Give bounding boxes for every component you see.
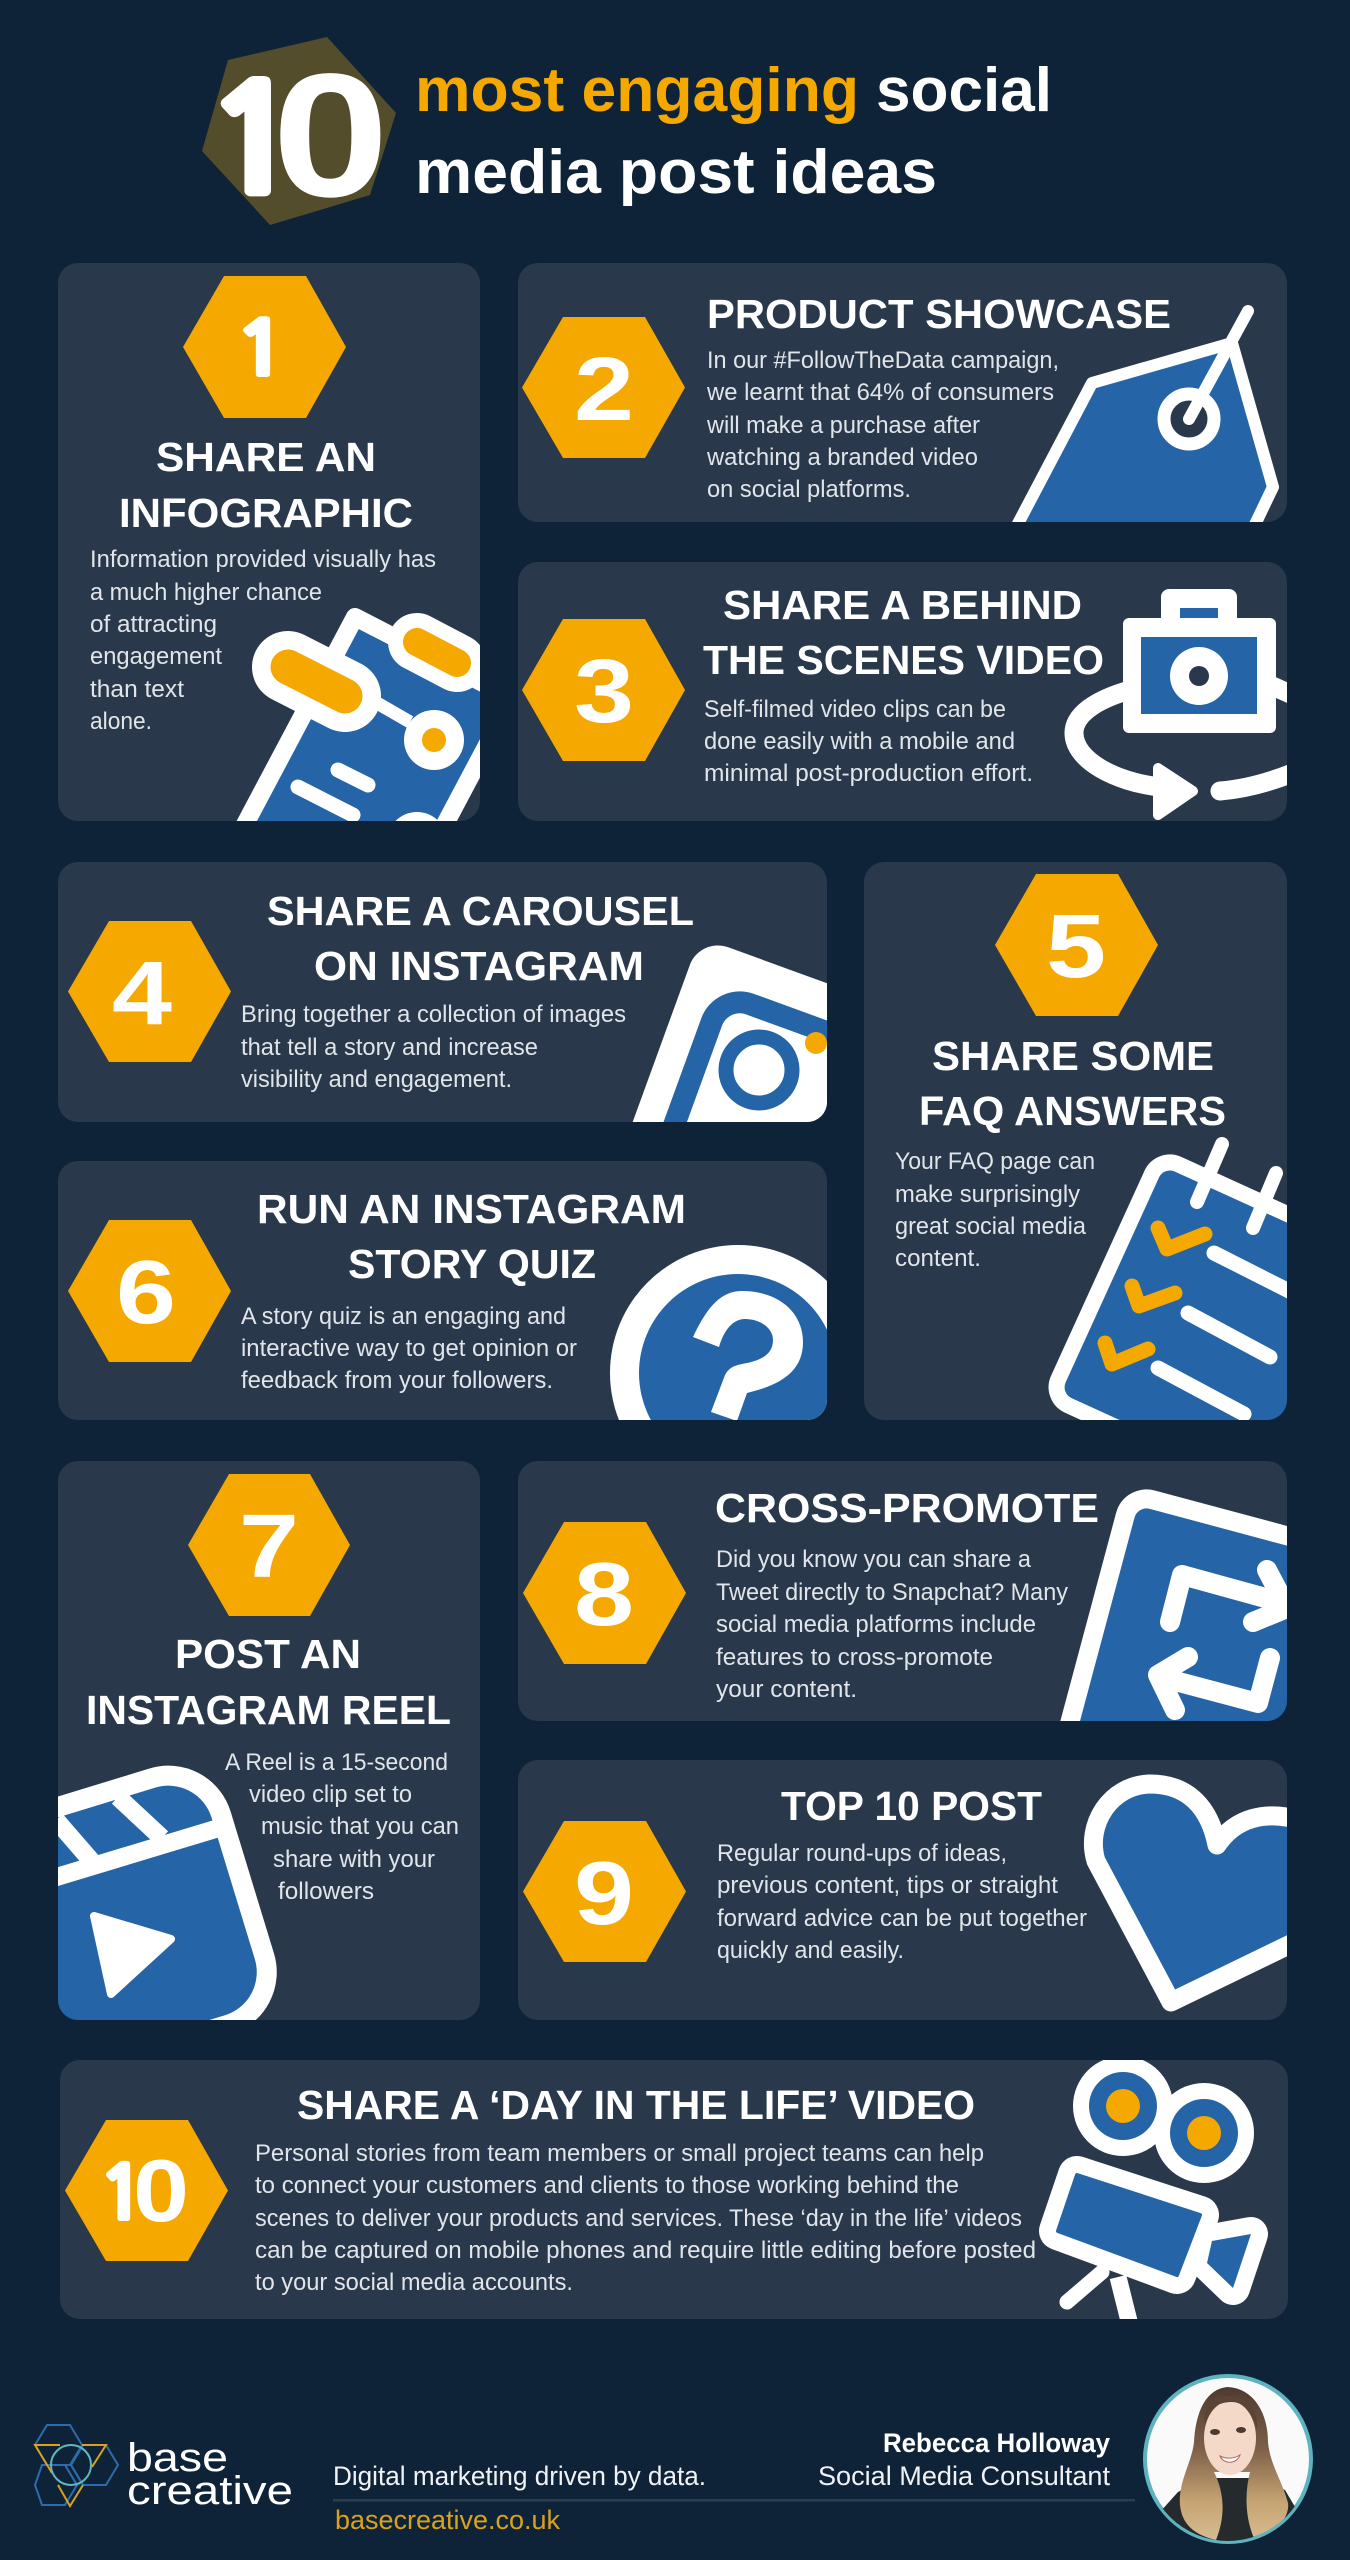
panel: 9 top 10 post (518, 1760, 1340, 2020)
body text: interactive way to get opinion or (241, 1335, 577, 1362)
body text: visibility and engagement. (241, 1066, 512, 1093)
body text (895, 1148, 1095, 1272)
body text: Information provided visually has (90, 546, 436, 573)
heading: FAQ ANSWERS (919, 1088, 1226, 1134)
tagline: Digital marketing driven by data. (333, 2461, 706, 2491)
body text: engagement (90, 643, 222, 670)
number hexagon 4 (68, 921, 231, 1062)
body text: to your social media accounts. (255, 2269, 573, 2296)
body text: content. (895, 1245, 981, 1272)
number hexagon 10: 1 (98, 2158, 146, 2231)
heading: SHARE SOME (932, 1033, 1214, 1079)
body text (704, 696, 1033, 787)
body text: feedback from your followers. (241, 1367, 553, 1394)
number hexagon 3 (522, 619, 685, 761)
body text (225, 1749, 459, 1905)
body text (706, 347, 1059, 503)
body text: Personal stories from team members or small project teams can help (255, 2140, 984, 2167)
number hexagon 8: 8 (574, 1545, 634, 1645)
body text: that tell a story and increase (241, 1034, 538, 1061)
title line two: media post ideas (415, 138, 937, 207)
heading: SHARE AN (156, 434, 376, 480)
heading (257, 1186, 686, 1287)
body text: make surprisingly (895, 1181, 1081, 1208)
number hexagon 6 (68, 1220, 231, 1362)
icon: heart (1084, 1774, 1287, 2012)
icon: rotating camera (1074, 589, 1295, 815)
body text: Self-filmed video clips can be (704, 696, 1006, 723)
number hexagon 5 (995, 874, 1158, 1016)
number hexagon 7 (188, 1474, 350, 1616)
body text: minimal post-production effort. (704, 760, 1033, 787)
icon: infographic sheet (236, 608, 480, 821)
number hexagon 1: 1 (234, 313, 288, 387)
number hexagon 4: 4 (112, 944, 172, 1044)
number hexagon 9: 9 (574, 1844, 634, 1944)
body text: to connect your customers and clients to those working behind the (255, 2172, 959, 2199)
heading: STORY QUIZ (348, 1241, 596, 1287)
icon: checklist (1048, 1137, 1287, 1420)
heading: SHARE A BEHIND (723, 582, 1082, 628)
panel: 5 faq answers (864, 862, 1287, 1420)
body text: great social media (895, 1213, 1086, 1240)
logo wordmark: base (127, 2436, 228, 2480)
body text: done easily with a mobile and (704, 728, 1015, 755)
heading (703, 582, 1104, 683)
heading: POST AN (175, 1631, 361, 1677)
body text: will make a purchase after (706, 412, 980, 439)
heading: INSTAGRAM REEL (86, 1687, 451, 1733)
number hexagon 2 (522, 317, 685, 458)
heading: ON INSTAGRAM (314, 943, 644, 989)
footer logo (35, 2425, 293, 2513)
heading: SHARE A ‘DAY IN THE LIFE’ VIDEO (297, 2082, 975, 2128)
heading (919, 1033, 1226, 1134)
number hexagon 10 (65, 2120, 228, 2261)
body text: A story quiz is an engaging and (241, 1303, 566, 1330)
number hexagon 10: 0 (133, 2141, 189, 2240)
body text: than text (90, 676, 184, 703)
title highlighted words: most engaging (415, 56, 859, 125)
body text: on social platforms. (707, 476, 911, 503)
heading (267, 888, 694, 989)
body text: watching a branded video (706, 444, 978, 471)
body text: scenes to deliver your products and services. These ‘day in the life’ videos (255, 2205, 1022, 2232)
body text: your content. (716, 1676, 857, 1703)
body text: we learnt that 64% of consumers (706, 379, 1054, 406)
icon: price tag (1012, 311, 1273, 535)
number hexagon 7: 7 (239, 1497, 299, 1597)
number hexagon 9 (523, 1821, 686, 1962)
body text: social media platforms include (716, 1611, 1036, 1638)
panel: 8 cross-promote (518, 1461, 1287, 1721)
number hexagon 3: 3 (574, 642, 634, 742)
title hexagon badge (202, 37, 396, 225)
footer logo: creative (127, 2469, 293, 2513)
body text: quickly and easily. (717, 1937, 904, 1964)
title number (204, 38, 389, 234)
body text: Bring together a collection of images (241, 1001, 626, 1028)
body text: A Reel is a 15-second (225, 1749, 448, 1776)
body text (255, 2140, 1036, 2296)
body text: share with your (273, 1846, 435, 1873)
number hexagon 8 (523, 1522, 686, 1664)
body text (716, 1546, 1069, 1703)
title number: 1 (204, 69, 304, 215)
body text: Did you know you can share a (716, 1546, 1031, 1573)
body text: can be captured on mobile phones and require little editing before posted (255, 2237, 1036, 2264)
logo mark (35, 2425, 118, 2506)
title line one end: social (876, 56, 1052, 125)
body text (241, 1001, 626, 1093)
body text: of attracting (90, 611, 217, 638)
number hexagon 2: 2 (574, 340, 634, 440)
number hexagon 5: 5 (1046, 897, 1106, 997)
panel: 3 behind the scenes (518, 562, 1295, 821)
title number: 0 (272, 38, 389, 234)
heading: THE SCENES VIDEO (703, 637, 1104, 683)
heading (86, 1631, 451, 1733)
website: basecreative.co.uk (335, 2505, 560, 2535)
heading: TOP 10 POST (781, 1783, 1042, 1829)
body text: Tweet directly to Snapchat? Many (716, 1579, 1069, 1606)
heading: CROSS-PROMOTE (715, 1485, 1099, 1531)
body text: followers (278, 1878, 374, 1905)
body text (241, 1303, 577, 1394)
body text: forward advice can be put together (717, 1905, 1087, 1932)
heading: RUN AN INSTAGRAM (257, 1186, 686, 1232)
heading (119, 434, 413, 536)
panel: 7 instagram reel (58, 1461, 480, 2020)
body text: video clip set to (249, 1781, 412, 1808)
heading: SHARE A CAROUSEL (267, 888, 694, 934)
icon: instagram (632, 946, 827, 1122)
body text: alone. (90, 708, 152, 735)
panel: 2 product showcase (518, 263, 1287, 535)
body text: Your FAQ page can (895, 1148, 1095, 1175)
icon: question mark (610, 1245, 827, 1420)
title (202, 37, 1052, 234)
body text: In our #FollowTheData campaign, (707, 347, 1059, 374)
icon: video reel (58, 1766, 277, 2020)
panel: 10 day in the life (60, 2056, 1288, 2325)
author name: Rebecca Holloway (883, 2428, 1110, 2458)
author role: Social Media Consultant (818, 2461, 1110, 2491)
body text (717, 1840, 1087, 1964)
body text: a much higher chance (90, 579, 322, 606)
heading: INFOGRAPHIC (119, 490, 413, 536)
number hexagon 1 (183, 276, 346, 418)
author portrait (1145, 2376, 1311, 2550)
panel: 6 story quiz (58, 1161, 827, 1420)
number hexagon 6: 6 (116, 1243, 176, 1343)
panel: 4 carousel on instagram (58, 862, 827, 1122)
body text: features to cross-promote (716, 1644, 993, 1671)
icon: film camera (1058, 2056, 1254, 2325)
heading: PRODUCT SHOWCASE (707, 291, 1171, 337)
panel: 1 share an infographic (58, 263, 480, 821)
body text: previous content, tips or straight (717, 1872, 1058, 1899)
body text: Regular round-ups of ideas, (717, 1840, 1007, 1867)
body text (90, 546, 436, 735)
body text: music that you can (261, 1813, 459, 1840)
icon: share arrows (1060, 1489, 1287, 1721)
